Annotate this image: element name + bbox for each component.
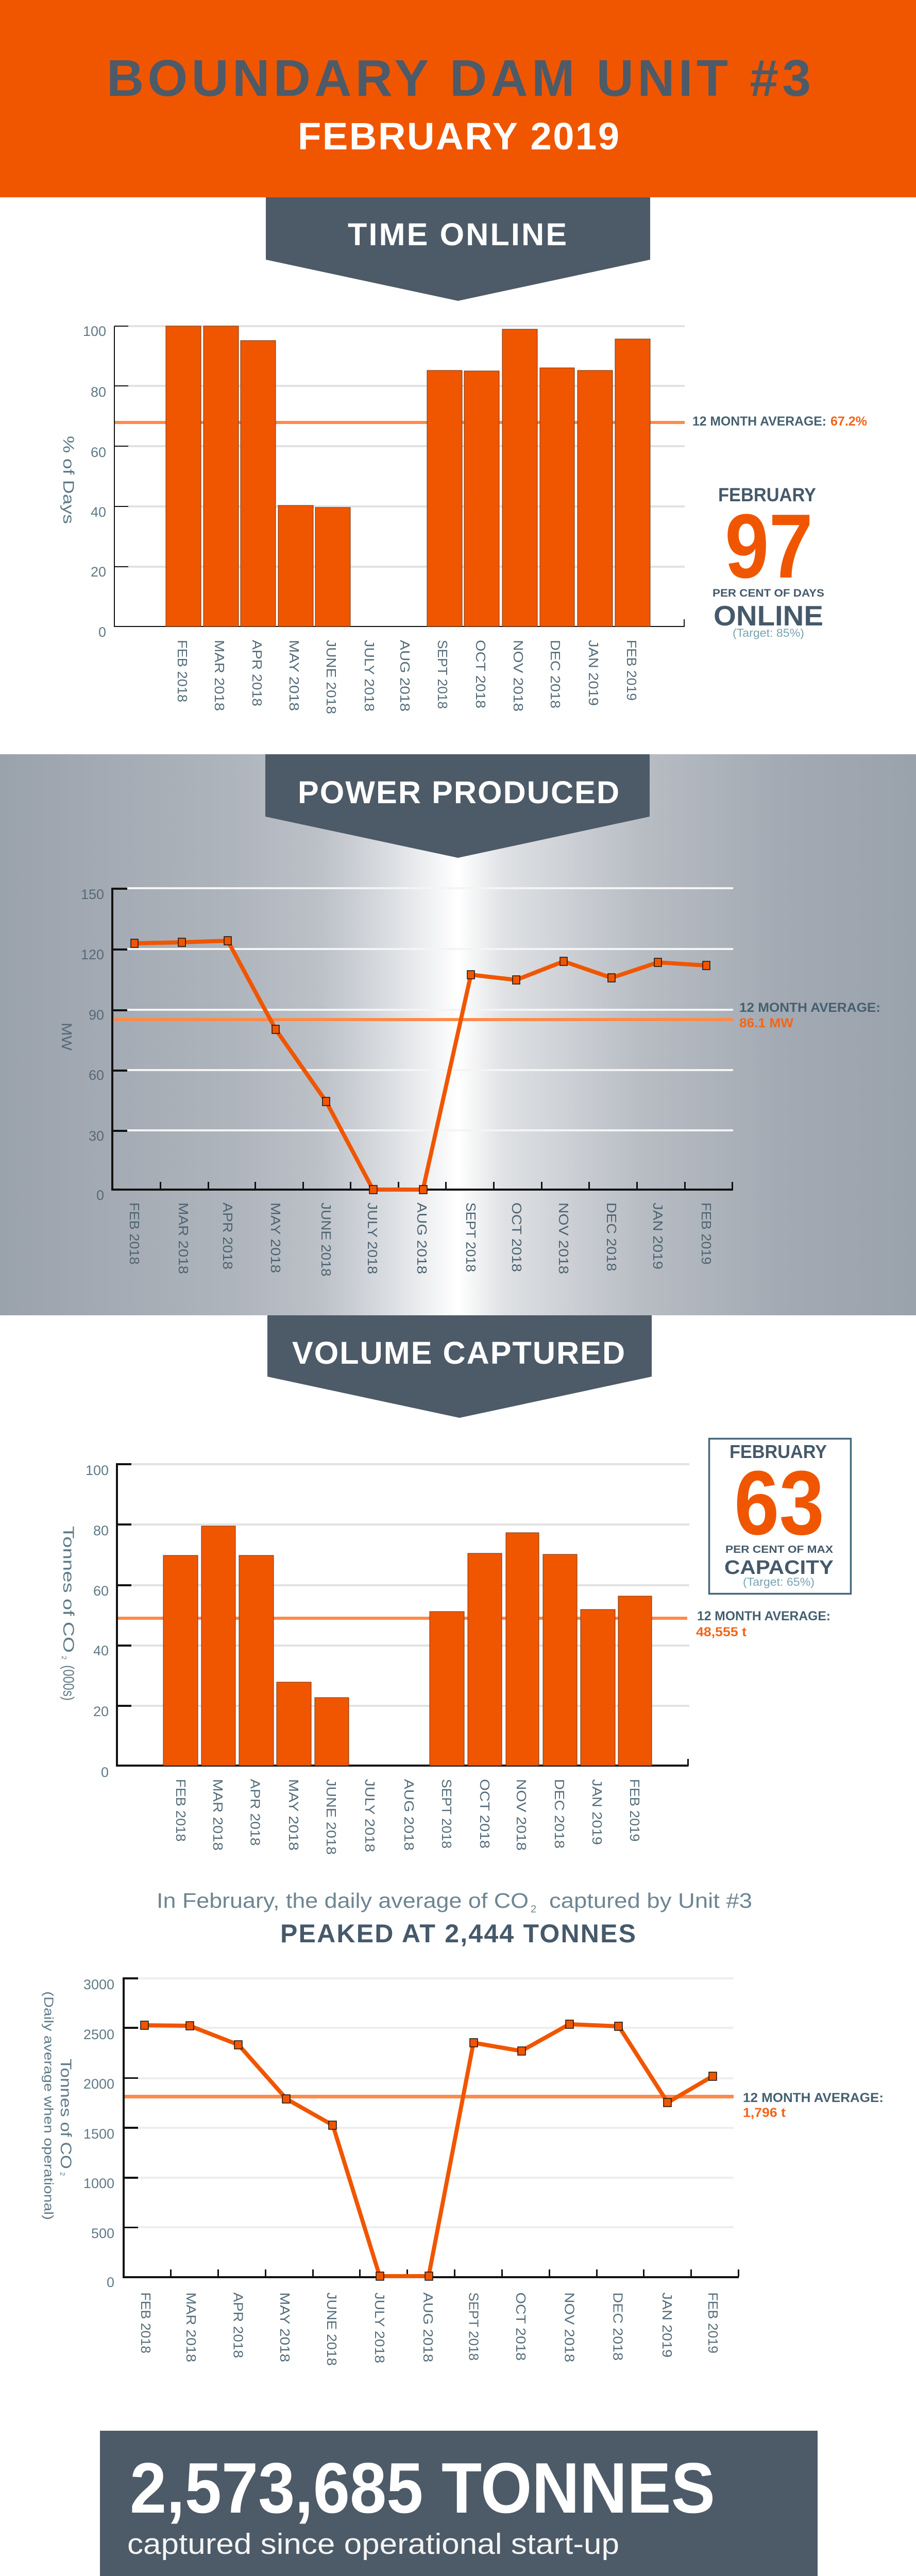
banner: power produced	[265, 754, 650, 858]
month labels: FEB 2018	[138, 2293, 154, 2353]
heading: daily average: In February, the daily average of CO	[157, 1889, 529, 1912]
month labels: JUNE 2018	[318, 1202, 334, 1277]
subtitle: FEBRUARY 2019	[298, 115, 619, 158]
y axis title: 2	[59, 2172, 66, 2176]
month labels: JAN 2019	[659, 2293, 675, 2358]
bar chart: volume captured	[60, 1463, 689, 1855]
callout: 97 per cent online	[713, 484, 824, 639]
average label: volume captured: 12 MONTH AVERAGE:	[697, 1609, 830, 1623]
y axis labels: 90	[89, 1007, 104, 1023]
month labels: JULY 2018	[365, 1202, 380, 1274]
data markers	[141, 2020, 717, 2280]
y axis labels: 30	[89, 1128, 104, 1144]
month labels: JUNE 2018	[324, 640, 339, 714]
month labels: FEB 2019	[699, 1202, 714, 1265]
y axis title: 2	[60, 1656, 68, 1659]
y axis labels: 2000	[83, 2076, 114, 2092]
month labels: MAR 2018	[212, 640, 227, 711]
callout: 63 per cent of max capacity: FEBRUARY	[730, 1441, 827, 1462]
y axis title	[41, 1991, 74, 2220]
month labels	[127, 1202, 714, 1277]
y axis labels: 120	[81, 947, 104, 962]
y axis labels: 1500	[83, 2126, 114, 2142]
month labels: MAY 2018	[286, 1779, 301, 1851]
month labels: OCT 2018	[509, 1202, 524, 1272]
month labels: SEPT 2018	[439, 1779, 454, 1849]
panel: power produced background	[0, 754, 916, 1315]
month labels: SEPT 2018	[463, 1202, 479, 1272]
month labels: DEC 2018	[552, 1779, 567, 1849]
month labels: MAR 2018	[176, 1202, 191, 1274]
y axis title: Tonnes of CO	[57, 2059, 74, 2169]
y axis title: (Daily average when operational)	[41, 1991, 56, 2220]
y axis labels: 0	[98, 624, 106, 640]
month labels: MAY 2018	[268, 1202, 283, 1273]
line chart: daily average CO2	[41, 1977, 739, 2366]
month labels: FEB 2019	[624, 640, 639, 701]
panel: total captured	[100, 2431, 818, 2576]
month labels: FEB 2018	[173, 1779, 189, 1842]
month labels: JAN 2019	[586, 640, 601, 706]
banner: volume captured	[267, 1315, 652, 1418]
month labels: AUG 2018	[397, 640, 413, 711]
month labels: JUNE 2018	[324, 2293, 340, 2366]
average label: time online: 67.2%	[830, 414, 867, 429]
callout: 63 per cent of max capacity: PER CENT OF MAX	[725, 1544, 834, 1555]
month labels: FEB 2019	[705, 2293, 721, 2353]
month labels	[175, 640, 639, 714]
month labels: NOV 2018	[556, 1202, 571, 1274]
month labels: APR 2018	[249, 640, 265, 706]
month labels: MAY 2018	[286, 640, 302, 711]
month labels: JUNE 2018	[324, 1779, 339, 1855]
average label: volume captured: 48,555 t	[696, 1625, 747, 1639]
callout: 97 per cent online: FEBRUARY	[718, 484, 816, 505]
y axis labels	[83, 1977, 114, 2290]
callout: 63 per cent of max capacity: (Target: 65%)	[743, 1575, 815, 1588]
average label: volume captured	[696, 1609, 830, 1639]
average label: daily CO2: 1,796 t	[743, 2106, 786, 2120]
month labels: AUG 2018	[414, 1202, 430, 1274]
month labels: OCT 2018	[477, 1779, 493, 1849]
month labels: APR 2018	[231, 2293, 246, 2358]
y axis labels: 80	[91, 384, 106, 400]
y axis labels: 500	[91, 2226, 114, 2241]
y axis labels: 1000	[83, 2176, 114, 2191]
heading: daily average: PEAKED AT 2,444 TONNES	[280, 1919, 636, 1948]
month labels: NOV 2018	[514, 1779, 529, 1851]
y axis labels: 0	[101, 1765, 109, 1780]
month labels: JAN 2019	[589, 1779, 605, 1845]
callout: 97 per cent online: ONLINE	[714, 600, 823, 632]
month labels: FEB 2018	[127, 1202, 142, 1265]
month labels: JAN 2019	[650, 1202, 666, 1269]
month labels: APR 2018	[220, 1202, 235, 1269]
month labels: JULY 2018	[372, 2293, 387, 2363]
y axis labels: 20	[91, 564, 106, 580]
month labels	[138, 2293, 721, 2366]
callout: 63 per cent of max capacity: 63	[734, 1452, 824, 1554]
y axis labels	[81, 887, 104, 1203]
average label: power produced	[739, 1001, 880, 1030]
month labels: OCT 2018	[473, 640, 488, 708]
y axis title: (000s)	[60, 1665, 77, 1701]
y axis labels: 0	[96, 1188, 104, 1203]
y axis labels: 40	[91, 504, 106, 520]
month labels: DEC 2018	[610, 2293, 625, 2361]
month labels: FEB 2019	[627, 1779, 642, 1842]
y axis labels: 0	[107, 2275, 114, 2290]
month labels: AUG 2018	[420, 2293, 436, 2362]
callout: 97 per cent online: 97	[725, 495, 813, 597]
heading: daily average: 2	[531, 1904, 536, 1915]
header band	[0, 0, 916, 197]
y axis labels: 100	[83, 324, 106, 339]
month labels: OCT 2018	[513, 2293, 529, 2361]
y axis labels	[86, 1463, 109, 1780]
average label: power produced: 86.1 MW	[739, 1016, 793, 1030]
heading: daily average: captured by Unit #3	[549, 1889, 752, 1912]
banner: time online	[266, 197, 650, 301]
bars	[163, 1526, 652, 1766]
total caption: captured since operational start-up	[127, 2528, 619, 2561]
y axis title: MW	[59, 1023, 75, 1051]
y axis title: % of Days	[60, 436, 77, 524]
banner: volume captured: VOLUME CAPTURED	[292, 1335, 625, 1370]
month labels: AUG 2018	[401, 1779, 417, 1851]
month labels: FEB 2018	[175, 640, 190, 702]
y axis labels: 80	[93, 1523, 109, 1538]
data line	[134, 941, 706, 1190]
month labels: NOV 2018	[511, 640, 526, 711]
average label: daily CO2	[743, 2091, 884, 2120]
callout: 63 per cent of max capacity: CAPACITY	[724, 1557, 834, 1579]
month labels: DEC 2018	[548, 640, 563, 708]
y axis labels: 2500	[83, 2027, 114, 2042]
month labels: JULY 2018	[362, 640, 377, 711]
title: BOUNDARY DAM UNIT #3	[107, 49, 811, 107]
heading: daily average	[157, 1889, 752, 1948]
average label: power produced: 12 MONTH AVERAGE:	[739, 1001, 880, 1015]
y axis labels: 40	[93, 1643, 109, 1658]
average label: daily CO2: 12 MONTH AVERAGE:	[743, 2091, 884, 2105]
y axis labels: 20	[93, 1704, 109, 1719]
callout: 63 per cent of max capacity	[709, 1438, 851, 1594]
banner: time online: TIME ONLINE	[348, 217, 567, 252]
month labels: JULY 2018	[362, 1779, 378, 1852]
month labels: MAR 2018	[210, 1779, 226, 1851]
y axis labels: 150	[81, 887, 104, 902]
average label: time online: 12 MONTH AVERAGE:	[692, 414, 826, 429]
y axis labels: 60	[91, 445, 106, 460]
banner: power produced: POWER PRODUCED	[298, 775, 619, 810]
y axis title: Tonnes of CO	[60, 1526, 77, 1653]
data markers	[131, 937, 710, 1194]
month labels: NOV 2018	[562, 2293, 577, 2362]
y axis labels	[83, 324, 106, 640]
total figure: 2,573,685 TONNES	[130, 2448, 715, 2528]
month labels: APR 2018	[247, 1779, 263, 1846]
month labels: MAR 2018	[183, 2293, 199, 2362]
line chart: power produced	[59, 887, 733, 1277]
y axis labels: 100	[86, 1463, 109, 1478]
callout: 97 per cent online: PER CENT OF DAYS	[713, 587, 824, 599]
data line	[144, 2024, 713, 2276]
bars	[166, 326, 650, 626]
month labels: SEPT 2018	[435, 640, 450, 709]
bar chart: time online	[60, 324, 685, 714]
y axis labels: 60	[89, 1067, 104, 1083]
month labels	[173, 1779, 642, 1855]
y axis labels: 3000	[83, 1977, 114, 1992]
callout: 97 per cent online: (Target: 85%)	[733, 626, 804, 639]
month labels: MAY 2018	[277, 2293, 293, 2362]
y axis title	[60, 1526, 77, 1701]
y axis labels: 60	[93, 1583, 109, 1599]
month labels: DEC 2018	[604, 1202, 619, 1272]
month labels: SEPT 2018	[466, 2293, 481, 2361]
